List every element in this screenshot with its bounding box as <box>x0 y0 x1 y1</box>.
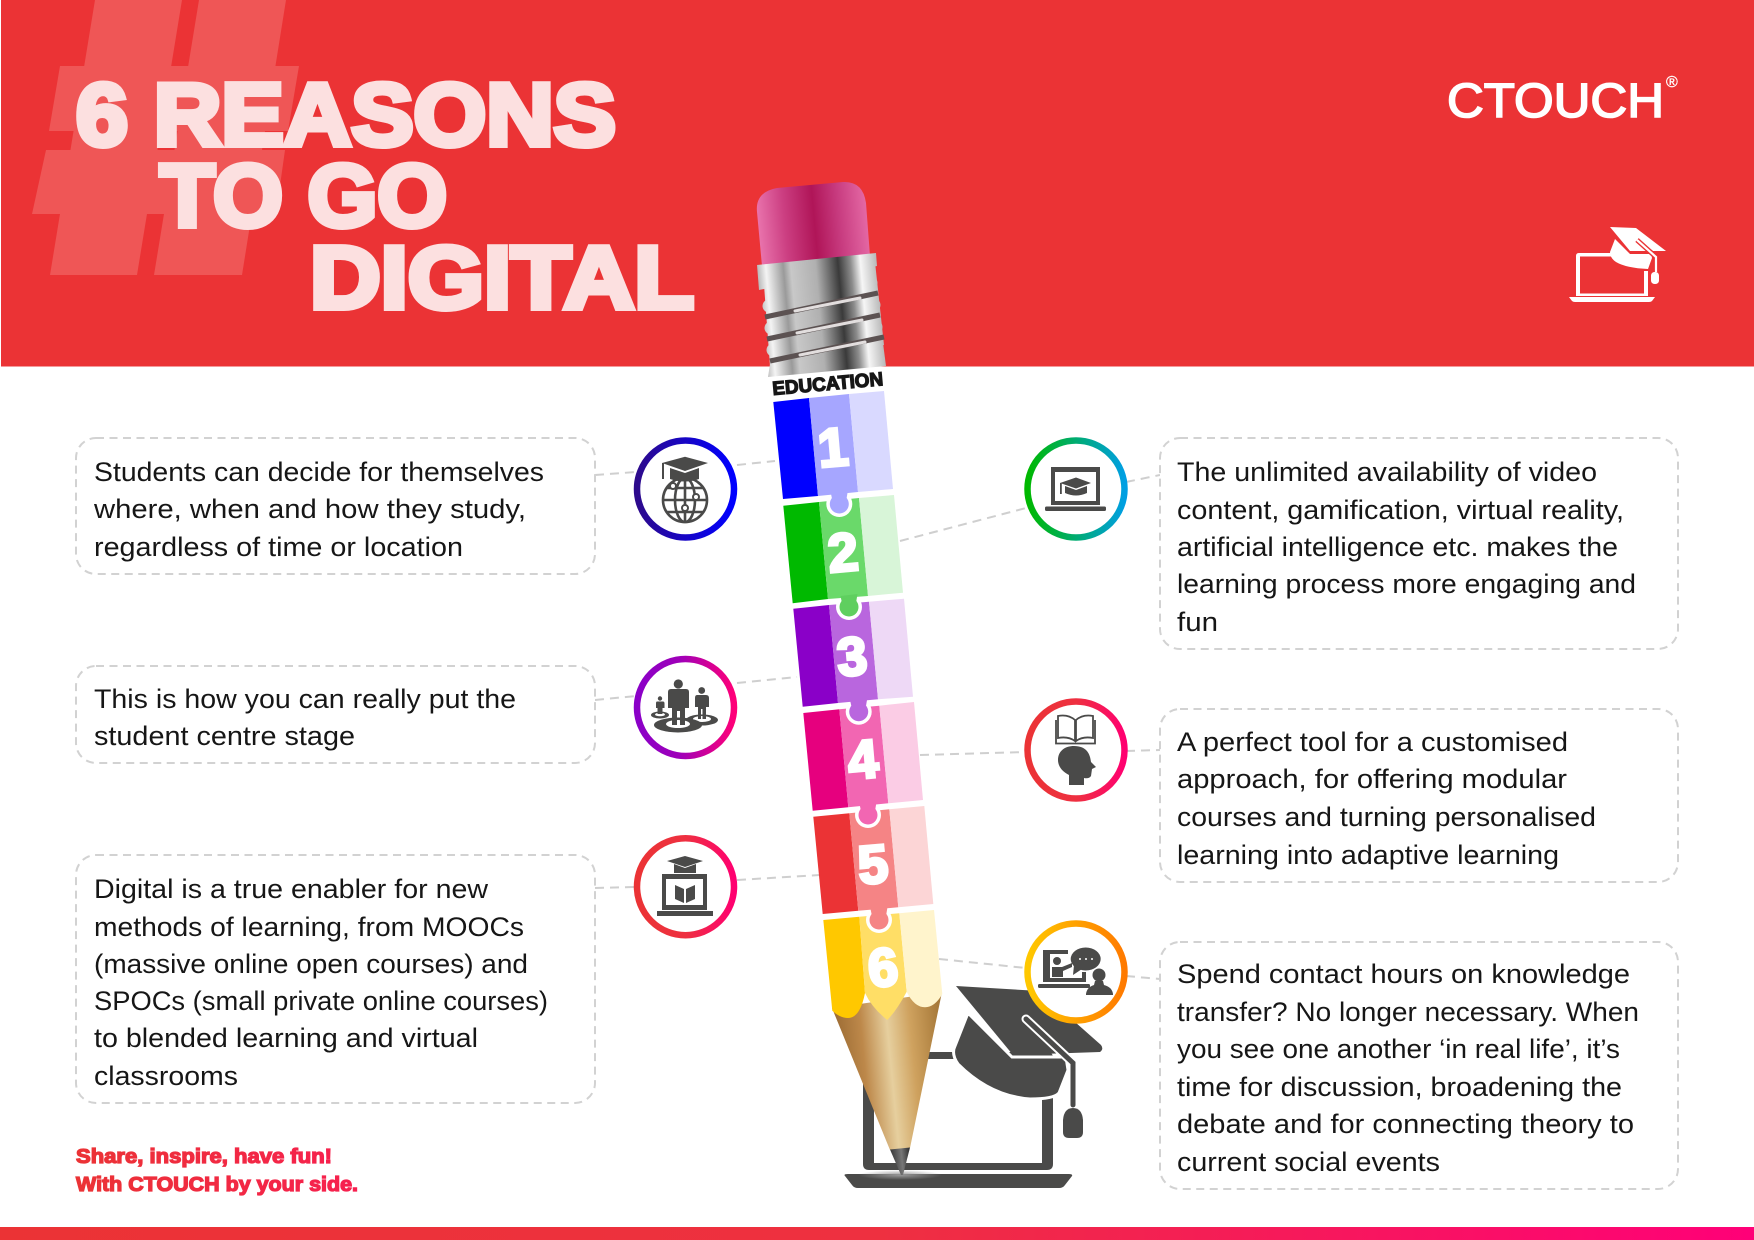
pencil segment 3 <box>793 594 913 721</box>
title: DIGITAL <box>310 228 694 327</box>
text box 3: Digital is a true enabler for new <box>94 874 489 904</box>
text box 6: transfer? No longer necessary. When <box>1177 997 1639 1027</box>
text box 3: SPOCs (small private online courses) <box>94 986 548 1016</box>
pencil metal ferrule <box>757 253 886 377</box>
icon circle 3: book on laptop with cap <box>637 838 734 935</box>
text box 6: current social events <box>1177 1147 1440 1177</box>
text box 6: debate and for connecting theory to <box>1177 1109 1634 1139</box>
pencil label: EDUCATION <box>772 369 884 400</box>
text box 6: you see one another ‘in real life’, it’s <box>1177 1034 1620 1064</box>
title: 6 REASONS <box>76 65 616 164</box>
text box 4: artificial intelligence etc. makes the <box>1177 532 1618 562</box>
tagline: Share, inspire, have fun! <box>76 1145 332 1168</box>
title: TO GO <box>160 146 447 245</box>
pencil segment 2: 2 <box>826 522 861 584</box>
pencil <box>757 182 942 1175</box>
pencil segment 4 <box>803 699 923 824</box>
text box 5: learning into adaptive learning <box>1177 840 1559 870</box>
text box 4: content, gamification, virtual reality, <box>1177 495 1624 525</box>
icon circle 1: cap and globe <box>637 440 734 538</box>
text box 5 <box>1160 709 1678 882</box>
pencil graphite point <box>890 1148 910 1175</box>
connector lines <box>595 461 1160 979</box>
pencil wood tip <box>832 992 942 1150</box>
text box 1 <box>76 438 595 574</box>
text box 6 <box>1160 942 1678 1189</box>
pencil segment 6 <box>823 907 942 1020</box>
text box 2: student centre stage <box>94 721 355 751</box>
text box 3 <box>76 855 595 1103</box>
logo: CTOUCH: ® <box>1666 74 1678 91</box>
text box 3: methods of learning, from MOOCs <box>94 912 524 942</box>
pencil segment 5: 5 <box>856 834 891 896</box>
pencil eraser <box>757 182 870 266</box>
icon: large laptop <box>844 1052 1072 1188</box>
header band <box>1 0 1754 366</box>
pencil segment 1 <box>773 391 893 514</box>
icon circle 4: cap on laptop <box>1028 440 1124 538</box>
logo: CTOUCH: CTOUCH <box>1447 75 1664 128</box>
text box 4: fun <box>1177 607 1218 637</box>
icon circle 6: teacher on screen and student <box>1028 924 1124 1020</box>
text box 3: (massive online open courses) and <box>94 949 528 979</box>
pencil segment 2 <box>783 491 903 616</box>
text box 4: learning process more engaging and <box>1177 569 1636 599</box>
text box 1: regardless of time or location <box>94 532 463 562</box>
text box 5: A perfect tool for a customised <box>1177 727 1568 757</box>
pencil segment 5 <box>813 802 933 930</box>
text box 4: The unlimited availability of video <box>1177 457 1597 487</box>
icon: large graduation cap <box>954 986 1102 1138</box>
bottom gradient bar <box>0 1227 1754 1240</box>
icon circle 2: people on platforms <box>637 659 734 756</box>
pencil segment 1: 1 <box>816 417 851 479</box>
hash symbol <box>32 0 299 275</box>
text box 5: courses and turning personalised <box>1177 802 1596 832</box>
text box 1: Students can decide for themselves <box>94 457 544 487</box>
text box 2 <box>76 666 595 763</box>
text box 3: to blended learning and virtual <box>94 1023 478 1053</box>
text box 3: classrooms <box>94 1061 238 1091</box>
text box 6: time for discussion, broadening the <box>1177 1072 1622 1102</box>
tagline: With CTOUCH by your side. <box>76 1173 358 1196</box>
text box 2: This is how you can really put the <box>94 684 516 714</box>
pencil segment 4: 4 <box>846 729 881 791</box>
pencil segment 6: 6 <box>866 937 901 999</box>
tagline <box>76 1145 358 1196</box>
text box 4 <box>1160 438 1678 649</box>
icon: white laptop with graduation cap <box>1569 227 1666 302</box>
icon circle 5: book above head <box>1028 702 1124 798</box>
pencil segment 3: 3 <box>835 626 870 688</box>
title <box>76 65 694 327</box>
text box 1: where, when and how they study, <box>93 494 526 524</box>
text box 5: approach, for offering modular <box>1177 764 1567 794</box>
text box 6: Spend contact hours on knowledge <box>1177 959 1630 989</box>
